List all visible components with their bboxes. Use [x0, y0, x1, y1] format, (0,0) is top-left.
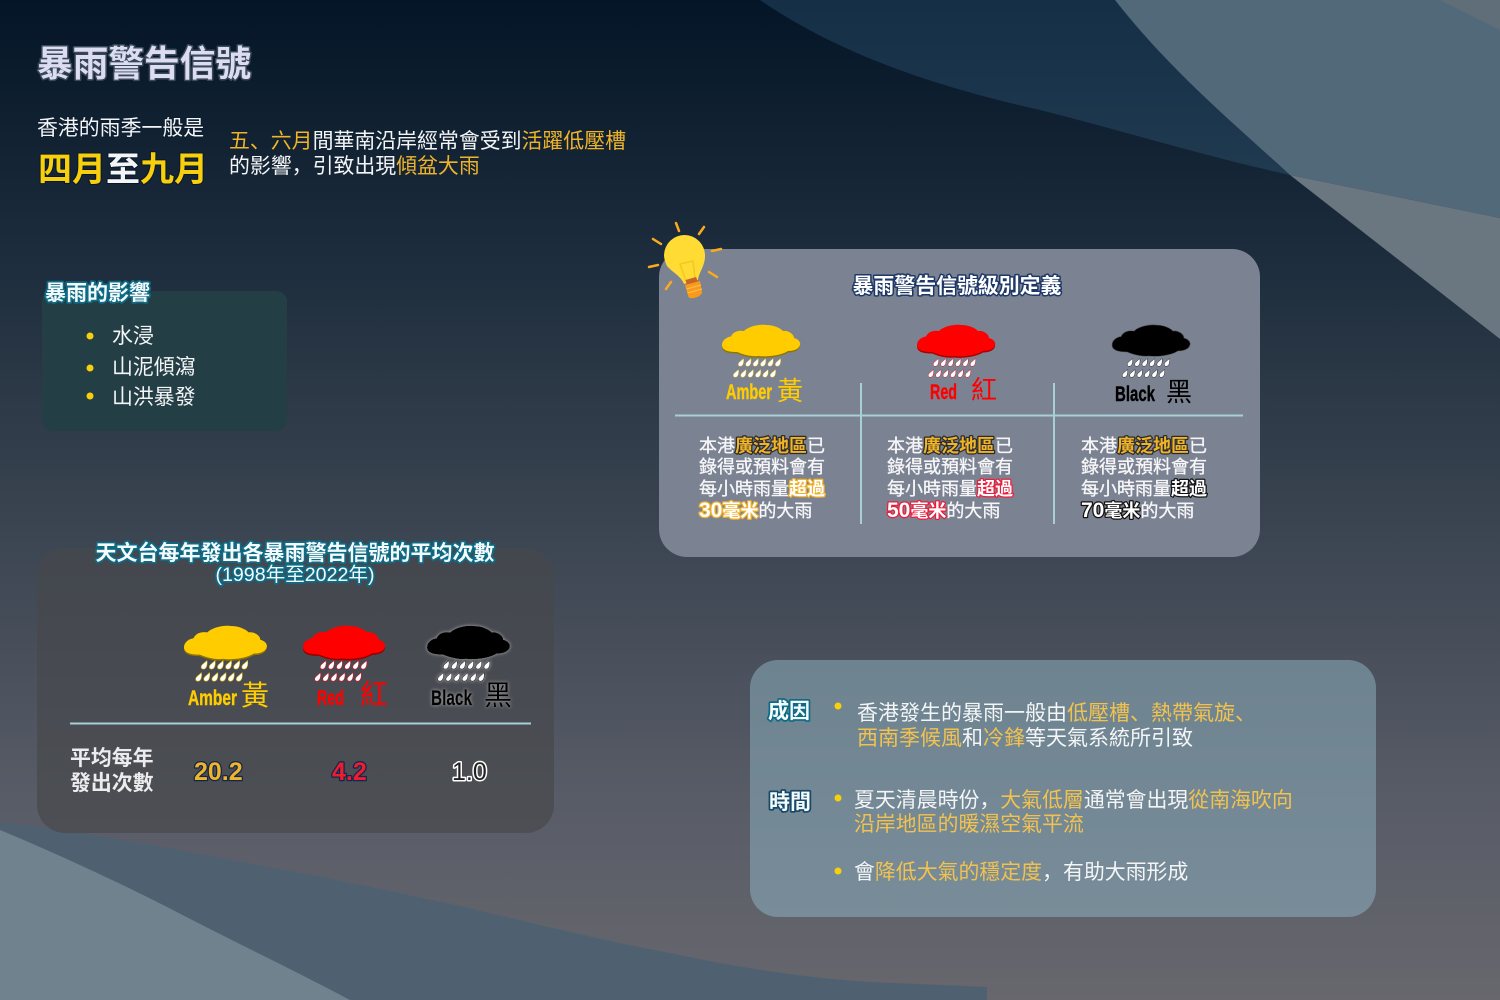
icon: black signal: 黑 — [1166, 377, 1192, 407]
value: amber: 20.2 — [194, 758, 243, 786]
intro: trough text — [229, 130, 626, 178]
text: black definition: 每小時雨量超過 — [1081, 479, 1207, 499]
icon: black signal: 黑 — [484, 680, 512, 711]
row label: 平均每年 — [70, 747, 154, 770]
text: red definition: 錄得或預料會有 — [887, 457, 1013, 477]
icon: amber signal — [184, 626, 269, 711]
panel: causes and timing — [750, 660, 1376, 917]
label: causes: 成因 — [768, 699, 810, 723]
row label — [70, 747, 154, 795]
icon: amber signal: Amber — [188, 687, 237, 710]
text: amber definition: 錄得或預料會有 — [699, 457, 825, 477]
title: 暴雨警告信號 — [37, 44, 251, 84]
text: amber definition: 每小時雨量超過 — [699, 479, 825, 499]
heading: impacts: 暴雨的影響 — [45, 281, 150, 305]
text: causes: 西南季候風和冷鋒等天氣系統所引致 — [857, 727, 1193, 750]
text: amber definition: 本港廣泛地區已 — [699, 436, 825, 456]
panel: warning level definitions — [0, 0, 1260, 557]
list: impacts: 水浸 — [112, 325, 154, 348]
text: timing 1: 夏天清晨時份，大氣低層通常會出現從南海吹向 — [854, 789, 1293, 812]
text: causes: 香港發生的暴雨一般由低壓槽、熱帶氣旋、 — [857, 702, 1256, 725]
text: black definition: 本港廣泛地區已 — [1081, 436, 1207, 456]
text: black definition: 錄得或預料會有 — [1081, 457, 1207, 477]
intro: trough text: 五、六月間華南沿岸經常會受到活躍低壓槽 — [229, 130, 626, 153]
icon: amber signal — [722, 325, 803, 406]
intro: rainy season: 四月至九月 — [38, 151, 208, 189]
list: impacts: 山洪暴發 — [112, 386, 196, 409]
intro: rainy season: 香港的雨季一般是 — [37, 117, 204, 140]
value: red: 4.2 — [332, 758, 367, 786]
icon: amber signal: Amber — [726, 381, 772, 404]
icon: black signal: Black — [431, 687, 472, 710]
heading: chart title: 天文台每年發出各暴雨警告信號的平均次數 — [96, 541, 494, 565]
heading: chart title: (1998年至2022年) — [215, 564, 375, 586]
panel: annual average chart — [37, 541, 554, 833]
icon: red signal: Red — [317, 687, 344, 710]
label: timing: 時間 — [769, 791, 811, 814]
icon: black signal — [427, 626, 512, 711]
text: causes — [834, 702, 1256, 750]
text: red definition: 每小時雨量超過 — [887, 479, 1013, 499]
icon: red signal — [303, 626, 388, 710]
text: amber definition: 30毫米的大雨 — [699, 499, 812, 522]
icon: red signal: Red — [930, 381, 957, 404]
icon: light bulb — [649, 223, 721, 298]
text: timing 2: 會降低大氣的穩定度，有助大雨形成 — [854, 861, 1188, 884]
value: black: 1.0 — [452, 758, 487, 786]
text: red definition: 50毫米的大雨 — [887, 499, 1000, 522]
text: red definition: 本港廣泛地區已 — [887, 436, 1013, 456]
icon: black signal: Black — [1115, 383, 1155, 406]
list: impacts — [86, 325, 196, 409]
panel: impacts of heavy rain — [42, 281, 287, 431]
icon: amber signal: 黃 — [777, 376, 803, 406]
intro: rainy season — [37, 117, 208, 189]
text: black definition: 70毫米的大雨 — [1081, 499, 1194, 522]
icon: red signal: 紅 — [360, 679, 388, 710]
text: timing 1 — [834, 789, 1293, 836]
list: impacts: 山泥傾瀉 — [112, 356, 196, 379]
row label: 發出次數 — [70, 772, 154, 795]
intro: trough text: 的影響，引致出現傾盆大雨 — [229, 155, 480, 178]
text: timing 1: 沿岸地區的暖濕空氣平流 — [854, 813, 1084, 836]
icon: red signal: 紅 — [971, 375, 997, 405]
heading: chart title — [96, 541, 494, 586]
icon: black signal — [1112, 325, 1192, 407]
icon: amber signal: 黃 — [241, 680, 269, 711]
heading: definitions: 暴雨警告信號級別定義 — [853, 274, 1062, 298]
icon: red signal — [917, 325, 997, 405]
